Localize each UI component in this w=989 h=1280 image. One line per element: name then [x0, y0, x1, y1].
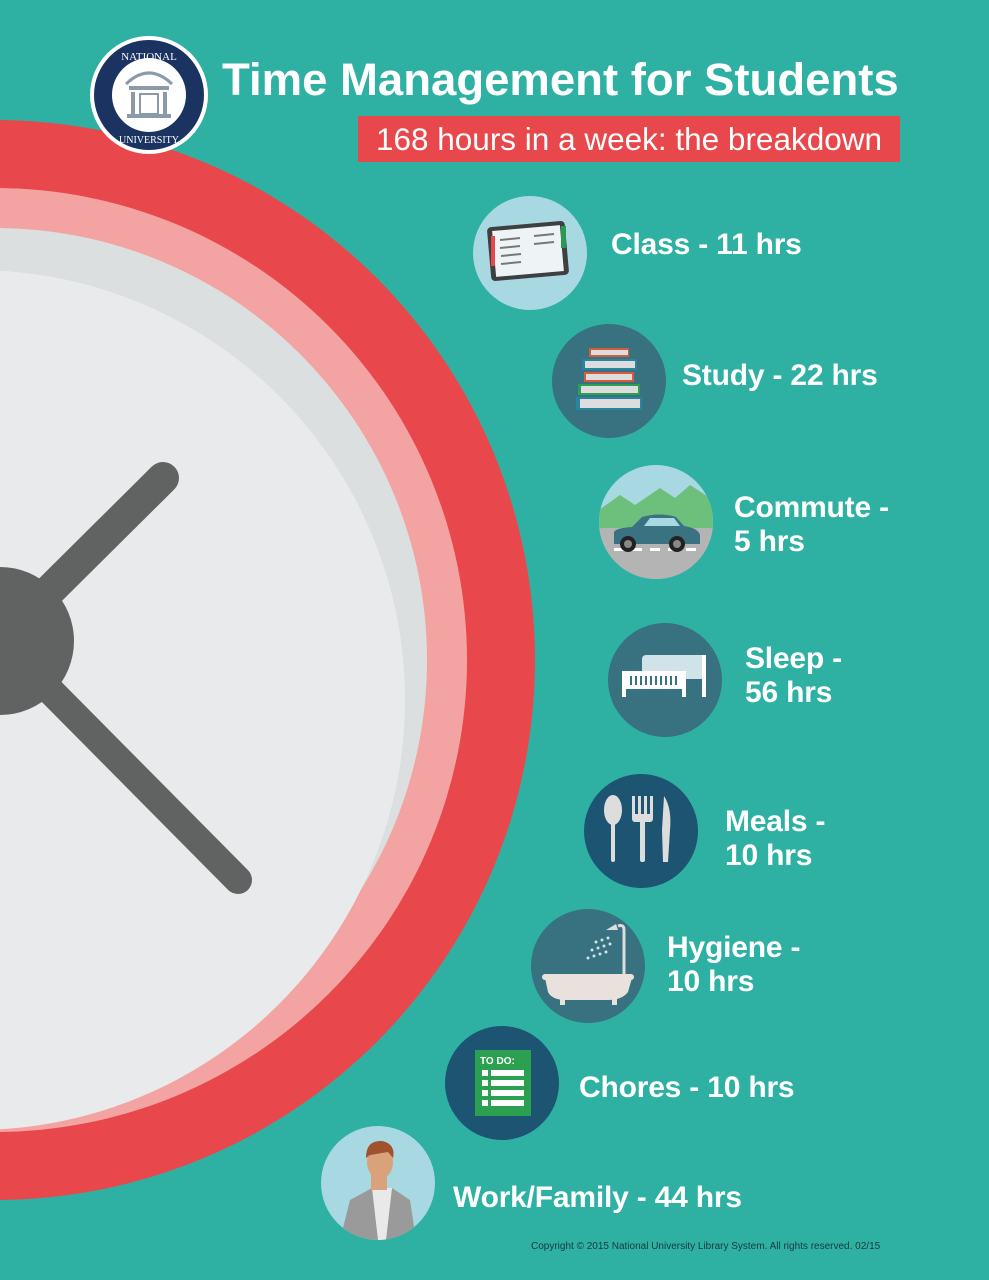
- icon: hygiene bathtub: [531, 909, 645, 1023]
- label: commute: 5 hrs: [734, 525, 805, 558]
- icon: work person: [321, 1126, 435, 1240]
- logo: NATIONAL: [121, 51, 177, 63]
- icon: chores to-do: [445, 1026, 559, 1140]
- icon: sleep bed: [608, 623, 722, 737]
- title: Time Management for Students: [222, 54, 899, 105]
- icon: commute car: [599, 465, 713, 579]
- label: meals: Meals -: [725, 805, 825, 838]
- label: chores: Chores - 10 hrs: [579, 1071, 794, 1104]
- label: study: Study - 22 hrs: [682, 359, 878, 392]
- logo: [90, 36, 208, 154]
- subtitle banner: 168 hours in a week: the breakdown: [376, 121, 882, 157]
- icon: meals cutlery: [584, 774, 698, 888]
- label: sleep: 56 hrs: [745, 676, 832, 709]
- logo: UNIVERSITY: [119, 135, 179, 146]
- clock: [0, 120, 535, 1200]
- label: commute: [734, 491, 889, 558]
- label: hygiene: 10 hrs: [667, 965, 754, 998]
- label: commute: Commute -: [734, 491, 889, 524]
- label: sleep: Sleep -: [745, 642, 842, 675]
- label: meals: [725, 805, 825, 872]
- label: hygiene: [667, 931, 800, 998]
- label: hygiene: Hygiene -: [667, 931, 800, 964]
- icon: study books: [552, 324, 666, 438]
- icon: class planner: [473, 196, 587, 310]
- copyright: Copyright © 2015 National University Library System. All rights reserved. 02/15: [531, 1241, 880, 1252]
- label: class: Class - 11 hrs: [611, 228, 802, 261]
- label: meals: 10 hrs: [725, 839, 812, 872]
- icon: chores to-do: TO DO:: [480, 1056, 515, 1067]
- clock and icons: [0, 36, 722, 1240]
- label: sleep: [745, 642, 842, 709]
- label: work/family: Work/Family - 44 hrs: [453, 1181, 742, 1214]
